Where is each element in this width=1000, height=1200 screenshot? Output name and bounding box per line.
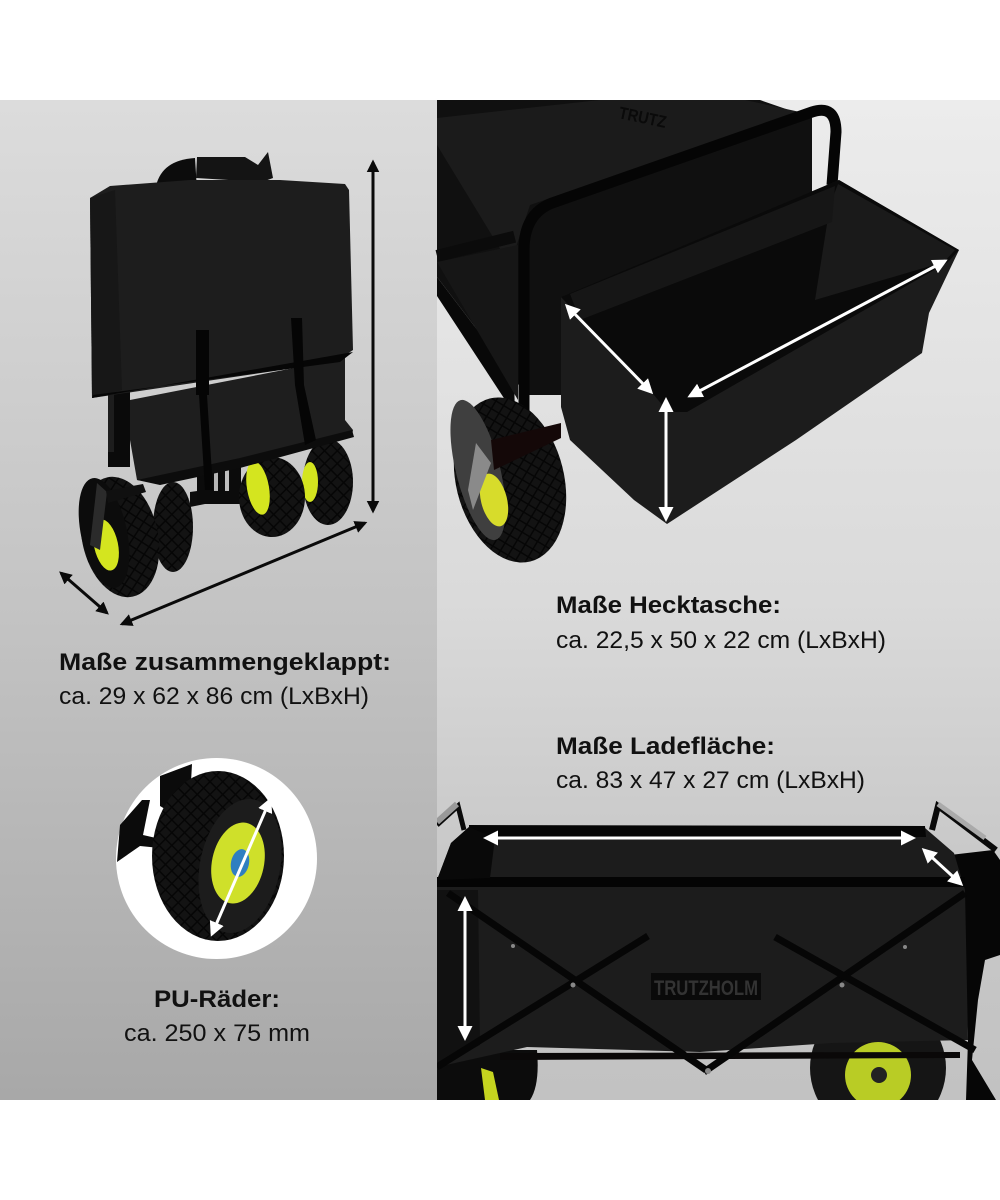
brand label: TRUTZHOLM (654, 977, 758, 1000)
text: folded dimensions: ca. 29 x 62 x 86 cm (LxBxH) (59, 683, 369, 710)
bottom bar (500, 1052, 960, 1060)
right side frame (950, 850, 1000, 1100)
frame tube (524, 110, 836, 420)
text: wheel dimensions (124, 986, 310, 1047)
text: rear bag dimensions (556, 592, 886, 654)
scissor frame (437, 893, 975, 1072)
rear bag (561, 180, 959, 524)
bag arrows (567, 261, 945, 519)
text: wheel dimensions: ca. 250 x 75 mm (124, 1020, 310, 1047)
wheels (303, 439, 353, 525)
wheels (437, 1050, 538, 1100)
panel: right background (437, 100, 1000, 1100)
wagon interior (437, 100, 812, 395)
folded bag body (90, 180, 353, 398)
photo: cargo area (437, 804, 1000, 1136)
cargo body (437, 827, 968, 1067)
text: wheel dimensions: PU-Räder: (154, 986, 280, 1013)
cargo arrows (465, 838, 961, 1038)
arrow: length (61, 573, 107, 613)
text: rear bag dimensions: Maße Hecktasche: (556, 592, 781, 619)
icon: wheel detail circle (116, 758, 317, 959)
wheel (437, 385, 583, 575)
text: cargo area dimensions: ca. 83 x 47 x 27 cm (LxBxH) (556, 767, 865, 794)
frame bolts (511, 944, 907, 1074)
photo: folded wagon (70, 152, 354, 605)
photo: rear bag on wagon: TRUTZ (617, 103, 668, 132)
strap buckles (196, 330, 213, 490)
arrow: height (372, 162, 374, 511)
text: cargo area dimensions: Maße Ladefläche: (556, 733, 775, 760)
panel: left background (0, 100, 437, 1100)
handles (437, 806, 464, 830)
text: folded dimensions (59, 649, 391, 710)
chassis (190, 485, 240, 507)
photo: rear bag on wagon (436, 100, 959, 575)
text: rear bag dimensions: ca. 22,5 x 50 x 22 cm (LxBxH) (556, 627, 886, 654)
arrow: width (122, 523, 365, 624)
text: folded dimensions: Maße zusammengeklappt: (59, 649, 391, 676)
lower fabric bag (130, 358, 353, 483)
text: cargo area dimensions (556, 733, 865, 794)
